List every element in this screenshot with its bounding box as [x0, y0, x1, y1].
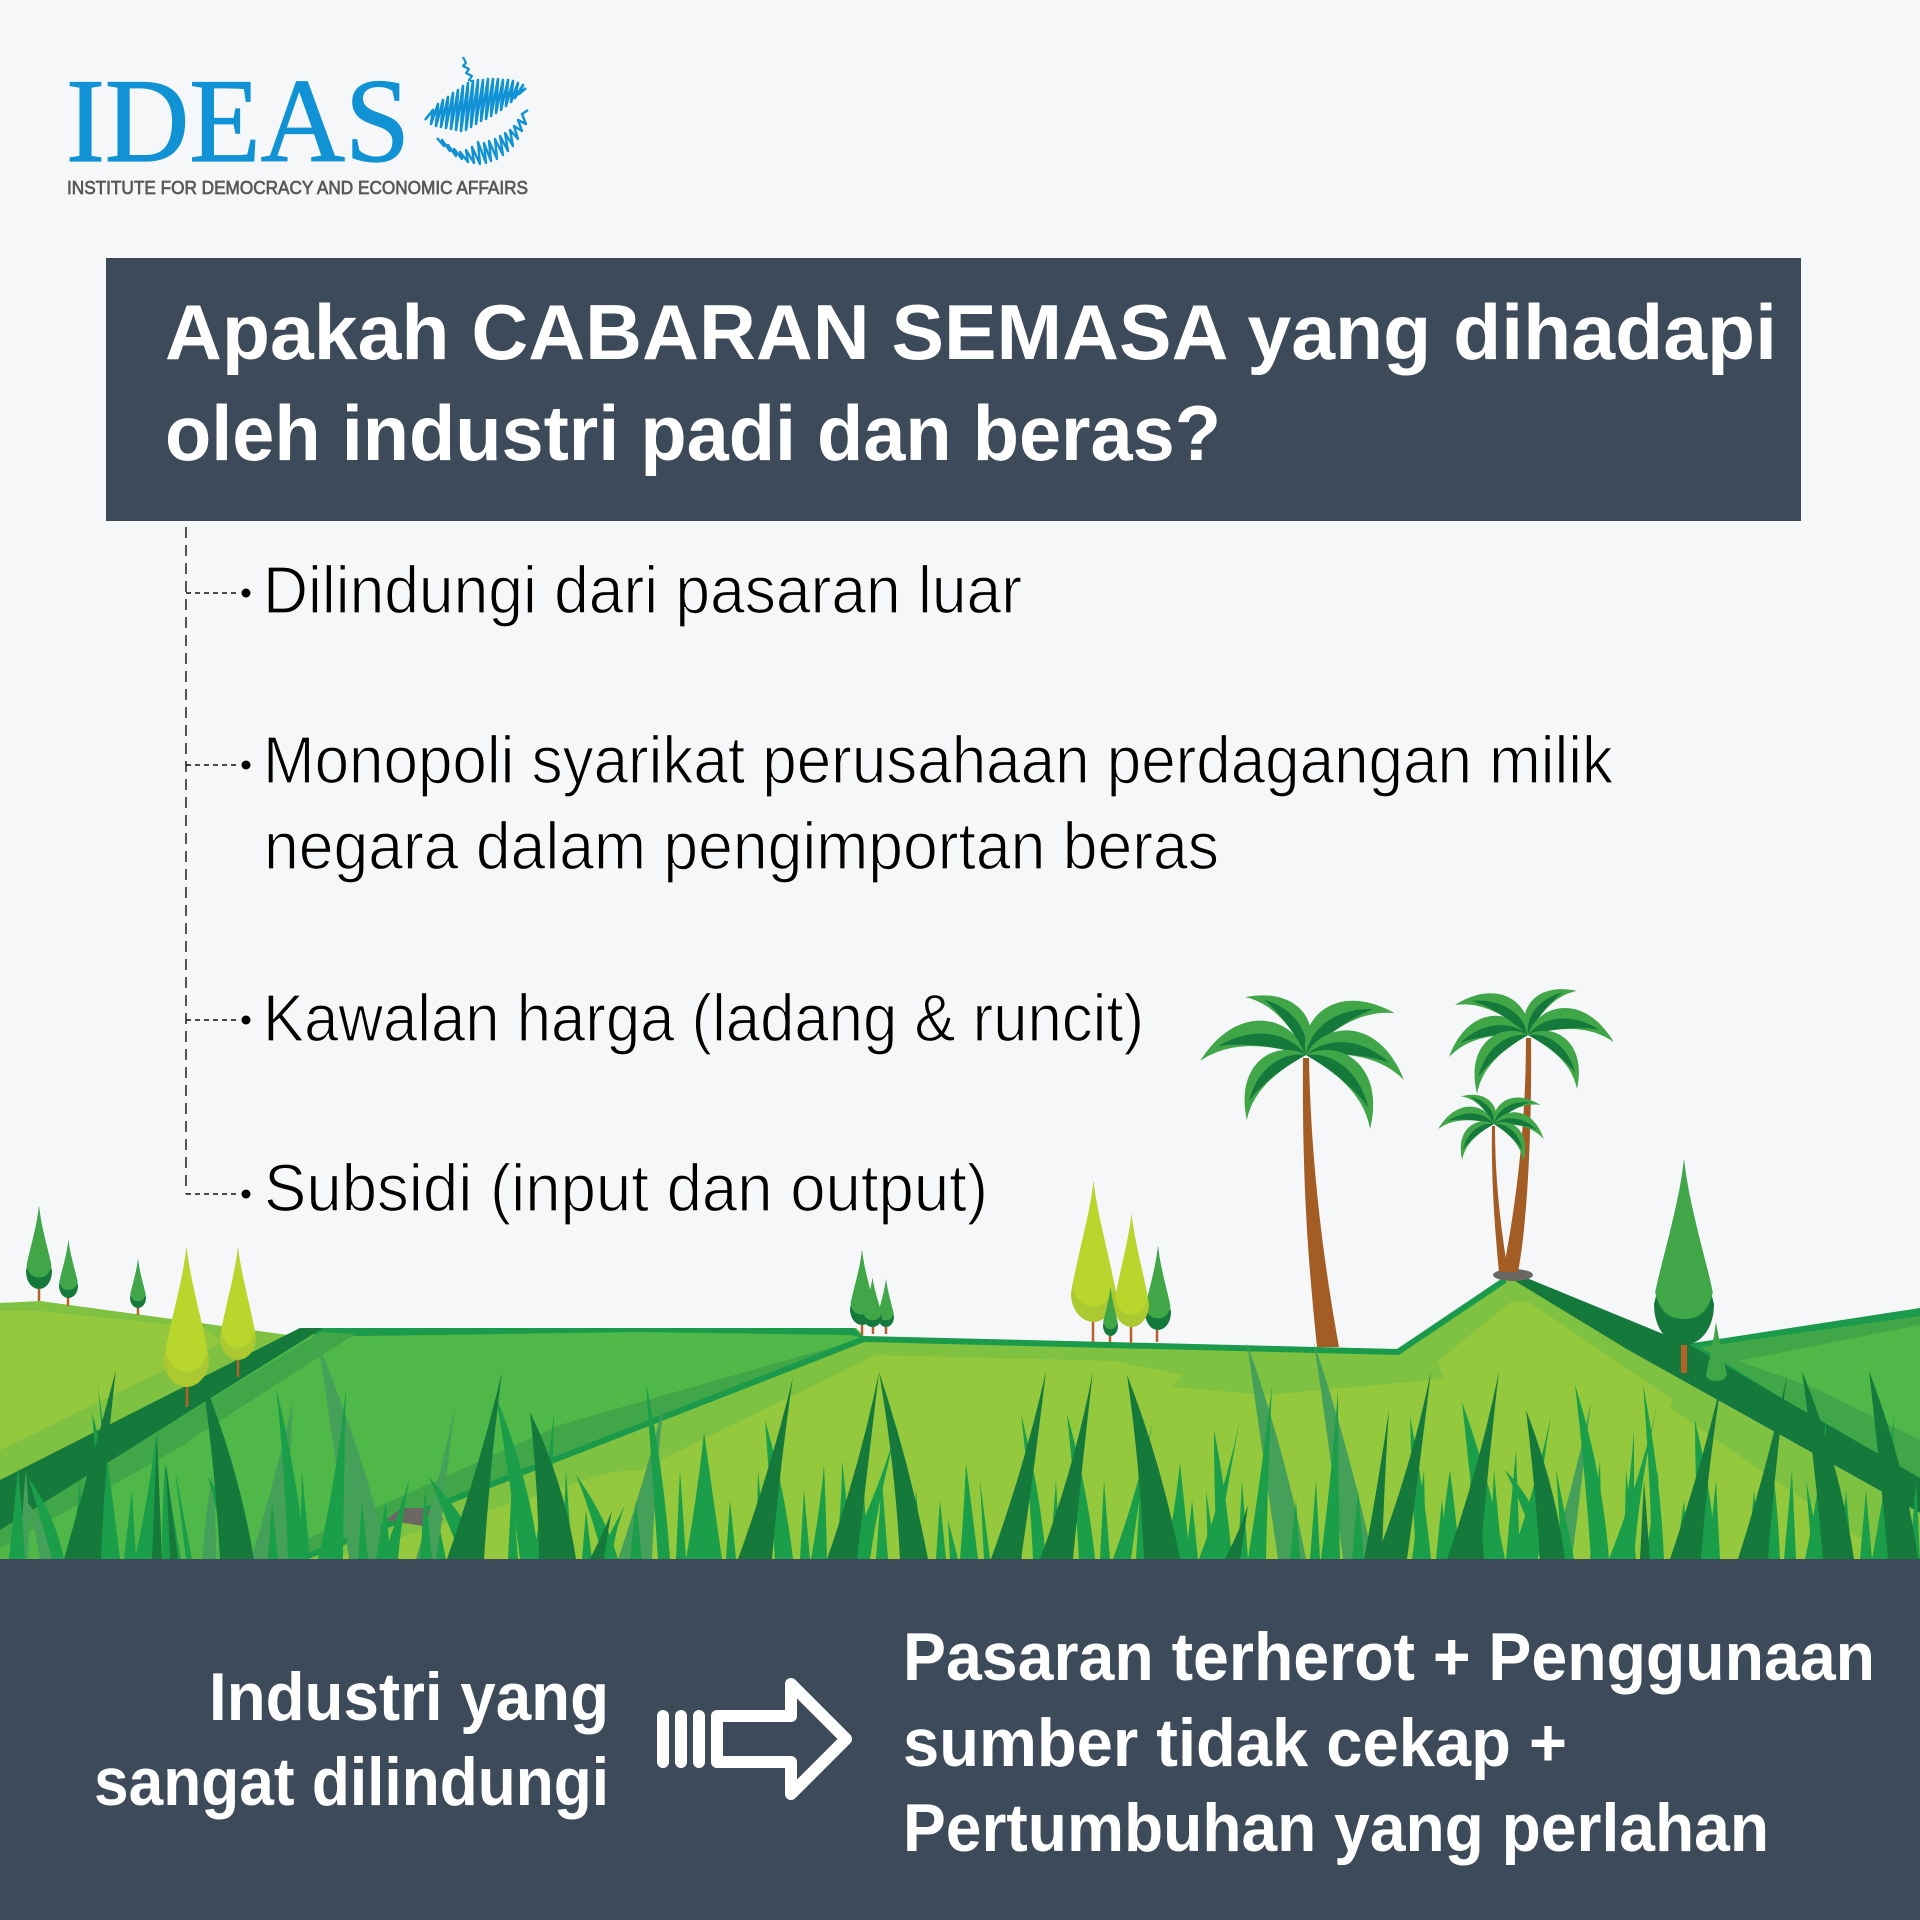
palm trees: [1198, 974, 1616, 1347]
bullet 1: Dilindungi dari pasaran luar: [263, 553, 1022, 628]
tree: small on right ridge: [1706, 1322, 1727, 1381]
left dark ridge: [0, 1328, 323, 1530]
bullet 2 line 2: negara dalam pengimportan beras: [264, 809, 1219, 884]
tree group: right cluster: [1071, 1181, 1171, 1336]
tree group: left yellows: [164, 1247, 256, 1387]
central field: [0, 1328, 866, 1559]
tree group: middle: [850, 1250, 894, 1327]
grass: muted blades: [20, 1343, 1706, 1559]
bullet 2 line 1: Monopoli syarikat perusahaan perdagangan milik: [263, 723, 1613, 798]
bullet list: [263, 553, 1613, 1226]
cypress trees: [26, 1159, 1727, 1407]
bottom panel: [0, 1559, 1920, 1920]
right statement: Pertumbuhan yang perlahan: [903, 1790, 1769, 1866]
tree group: left greens: [26, 1206, 146, 1308]
icon: arrow: [657, 1684, 846, 1794]
title line 1: Apakah CABARAN SEMASA yang dihadapi: [165, 288, 1777, 376]
left statement: Industri yang: [209, 1659, 609, 1735]
logo: IDEAS: [66, 54, 528, 198]
logo tagline: INSTITUTE FOR DEMOCRACY AND ECONOMIC AFFAIRS: [67, 178, 528, 198]
right statement: Pasaran terherot + Penggunaan: [903, 1619, 1875, 1695]
grass foreground: [9, 1343, 1920, 1559]
title line 2: oleh industri padi dan beras?: [165, 389, 1221, 477]
foreground hill: [295, 1280, 1920, 1559]
bullet 4: Subsidi (input dan output): [264, 1151, 988, 1226]
bullet 3: Kawalan harga (ladang & runcit): [263, 981, 1144, 1056]
logo icon: scribble bird: [425, 57, 528, 164]
grass: dark blades: [64, 1370, 1918, 1559]
right field: [1680, 1308, 1920, 1485]
rocks: [386, 1269, 1533, 1526]
grass: thin mid blades: [14, 1385, 1920, 1559]
palm: upper right: [1441, 974, 1616, 1272]
left hill: [0, 1301, 310, 1500]
right statement: sumber tidak cekap +: [903, 1705, 1567, 1781]
tree: large on right ridge: [1654, 1159, 1714, 1345]
right dark ridge: [1510, 1276, 1920, 1513]
right statement: [903, 1619, 1875, 1866]
tree trunk: large: [1681, 1345, 1687, 1373]
palm: small: [1436, 1085, 1549, 1272]
landscape: hills and fields: [0, 1269, 1920, 1559]
grass: mid blades: [9, 1383, 1894, 1559]
dashed connector tree: [186, 527, 250, 1198]
left statement: [94, 1659, 609, 1820]
tree trunks: [39, 1289, 1157, 1407]
palm: tall left: [1198, 976, 1413, 1347]
logo wordmark: IDEAS: [66, 54, 410, 187]
left statement: sangat dilindungi: [94, 1744, 609, 1820]
title banner: [106, 258, 1801, 521]
